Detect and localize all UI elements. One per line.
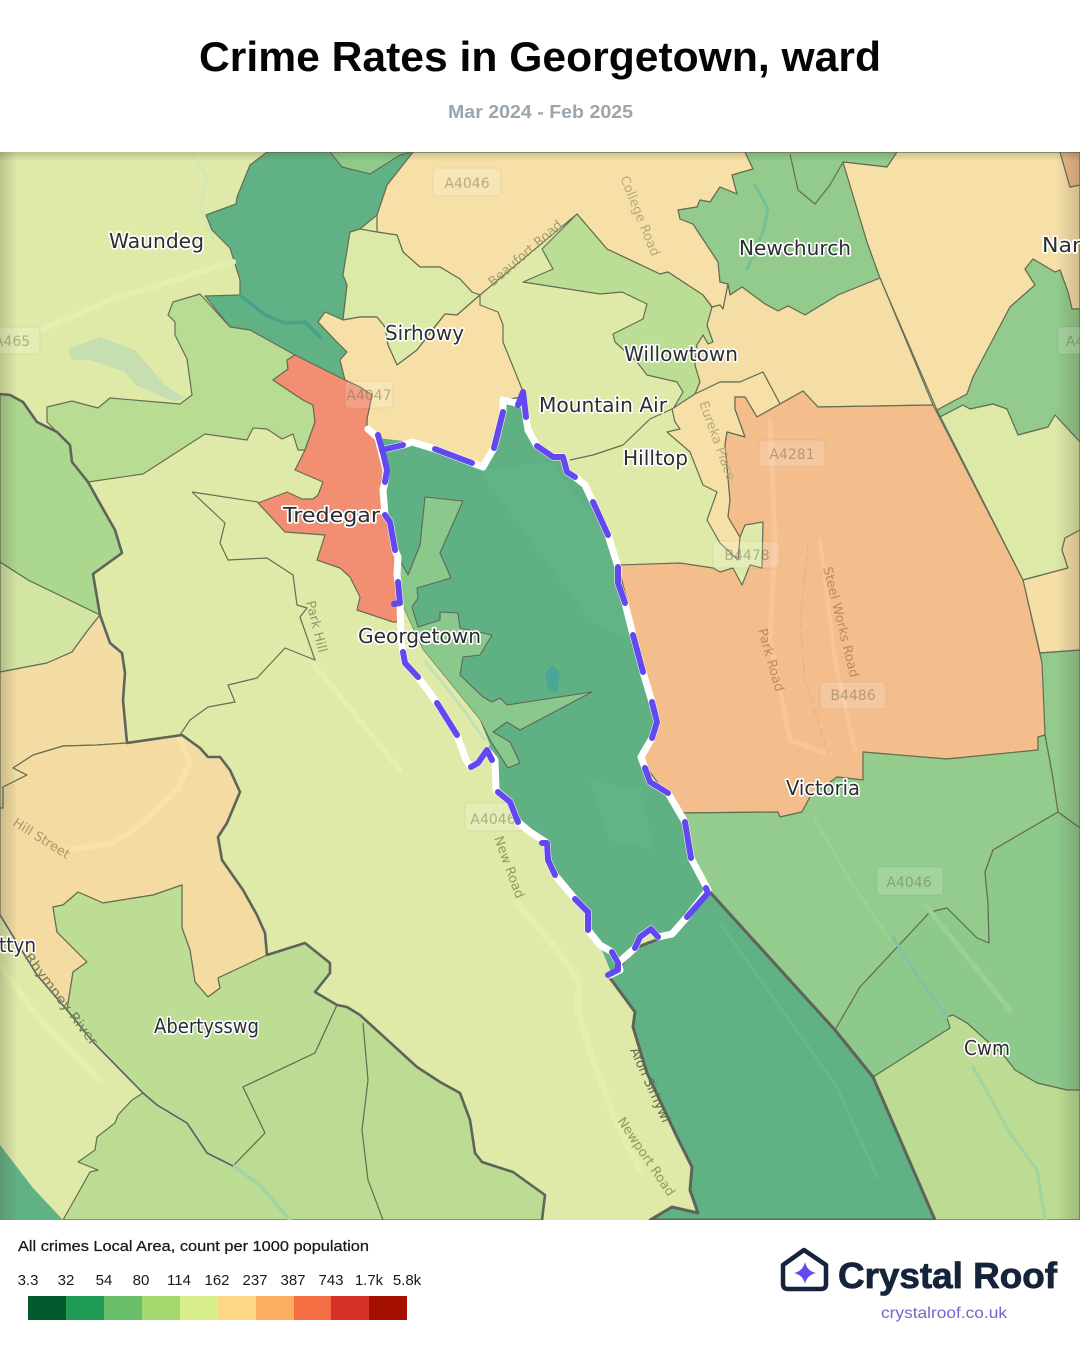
- legend tick labels: 3.3: [18, 1272, 38, 1289]
- legend tick labels: 1.7k: [355, 1272, 384, 1289]
- legend colour scale: [28, 1296, 407, 1320]
- legend tick labels: 32: [58, 1272, 74, 1289]
- region: Eureka Place tan: [667, 372, 780, 560]
- region: east green with mid south: [835, 812, 1080, 1090]
- place name labels: Victoria: [786, 776, 860, 800]
- shield behind ward: [465, 803, 531, 831]
- road number labels: B4478: [724, 548, 770, 564]
- place name labels: Sirhowy: [385, 321, 464, 345]
- road number labels: A4281: [769, 447, 815, 463]
- map edge shading: [0, 152, 1080, 1220]
- region: north tan: [377, 152, 753, 309]
- legend tick labels: 114: [167, 1272, 191, 1289]
- road name labels: Eureka Place: [695, 399, 738, 483]
- place name labels: Mountain Air: [539, 393, 668, 417]
- region: Cwm: [873, 1015, 1080, 1220]
- region: Willowtown green: [523, 214, 713, 409]
- region: Tredegar red: [258, 355, 398, 622]
- region: Hill Street tan: [0, 735, 267, 1010]
- road number labels: B4486: [830, 688, 876, 704]
- logo wordmark: Crystal Roof: [838, 1255, 1058, 1296]
- road name labels: College Road: [616, 174, 662, 259]
- region: small green patch at top: [330, 152, 413, 174]
- title: Crime Rates in Georgetown, ward: [199, 33, 881, 80]
- road number labels: [0, 176, 1080, 891]
- legend title: All crimes Local Area, count per 1000 population: [18, 1238, 369, 1255]
- inner neighbourhood, lighter green: [398, 497, 592, 768]
- region: Abertysswg green: [53, 885, 337, 1166]
- pond: [545, 665, 560, 693]
- place name labels: Abertysswg: [154, 1014, 259, 1038]
- region: right lime: [937, 404, 1080, 580]
- water: reservoir: [68, 337, 185, 402]
- icon: house with star: [783, 1250, 826, 1289]
- road name labels: Hill Street: [10, 816, 72, 862]
- road name labels: Beaufort Road: [486, 218, 566, 290]
- road name labels: [10, 174, 861, 1199]
- region: top right tan: [843, 152, 1080, 410]
- region: southern green: [63, 1005, 545, 1220]
- legend tick labels: 54: [96, 1272, 112, 1289]
- ward boundary: white line: [368, 400, 708, 975]
- region: right tan: [1023, 530, 1080, 653]
- road name labels: Afon Sirhywi: [626, 1046, 673, 1125]
- shield behind ward: A4046: [470, 812, 516, 828]
- legend tick labels: 237: [242, 1272, 268, 1289]
- thin district lines: [180, 154, 843, 1220]
- region: right green: [937, 259, 1080, 442]
- road name labels: Steel Works Road: [819, 565, 861, 679]
- place name labels: Tredegar: [282, 503, 381, 527]
- website url: crystalroof.co.uk: [881, 1305, 1008, 1322]
- place name labels: Willowtown: [624, 342, 738, 366]
- Georgetown ward area: [378, 400, 708, 975]
- lime strip inside western edge: [401, 607, 490, 767]
- region: west green: [0, 394, 122, 615]
- region: Newchurch: [678, 152, 897, 315]
- road number labels: A4047: [346, 388, 392, 404]
- legend tick labels: 5.8k: [393, 1272, 422, 1289]
- road number labels: A4046: [886, 875, 932, 891]
- region: corner orange: [1060, 152, 1080, 187]
- road name labels: New Road: [490, 834, 527, 901]
- choropleth map: [0, 152, 1080, 1220]
- region: north-west green: [47, 294, 315, 482]
- region: central tan: [695, 278, 933, 407]
- region: right edge green: [1040, 650, 1080, 828]
- place name labels: Waundeg: [109, 229, 204, 253]
- place name labels: ttyn: [0, 933, 36, 957]
- legend tick labels: 743: [318, 1272, 344, 1289]
- road name labels: Park Hill: [302, 599, 329, 654]
- region: orange large: [618, 391, 1045, 817]
- region: west lime: [0, 562, 100, 672]
- region: west tan: [0, 615, 127, 808]
- road and river texture: [190, 152, 1046, 1220]
- place name labels: [0, 229, 1080, 1060]
- road name labels: Newport Road: [614, 1115, 677, 1199]
- logo: Crystal Roof: [783, 1250, 1058, 1322]
- legend tick labels: 80: [133, 1272, 149, 1289]
- road name labels: Park Road: [754, 627, 786, 693]
- road name labels: Rhymney River: [21, 950, 101, 1049]
- legend tick labels: [18, 1272, 422, 1289]
- subtitle: date range: Mar 2024 - Feb 2025: [448, 101, 633, 122]
- legend: [18, 1238, 422, 1320]
- road shields: [0, 168, 1080, 895]
- region: south dark green: [610, 890, 935, 1220]
- lighter patches in ward: [480, 462, 630, 640]
- place name labels: Georgetown: [358, 624, 481, 648]
- place name labels: Hilltop: [623, 446, 688, 470]
- region: dark green north: [205, 152, 413, 380]
- legend tick labels: 387: [280, 1272, 306, 1289]
- place name labels: Cwm: [964, 1036, 1010, 1060]
- region: corner dark green: [0, 1145, 63, 1220]
- region: Sirhowy tan: [318, 295, 522, 467]
- place name labels: Newchurch: [739, 236, 851, 260]
- road number labels: A4046: [444, 176, 490, 192]
- legend tick labels: 162: [204, 1272, 230, 1289]
- region: Victoria green: [680, 735, 1058, 1030]
- region: Sirhowy lime: [343, 229, 480, 365]
- thick district borders: [0, 394, 545, 1220]
- ward boundary: purple dashes: [378, 392, 708, 975]
